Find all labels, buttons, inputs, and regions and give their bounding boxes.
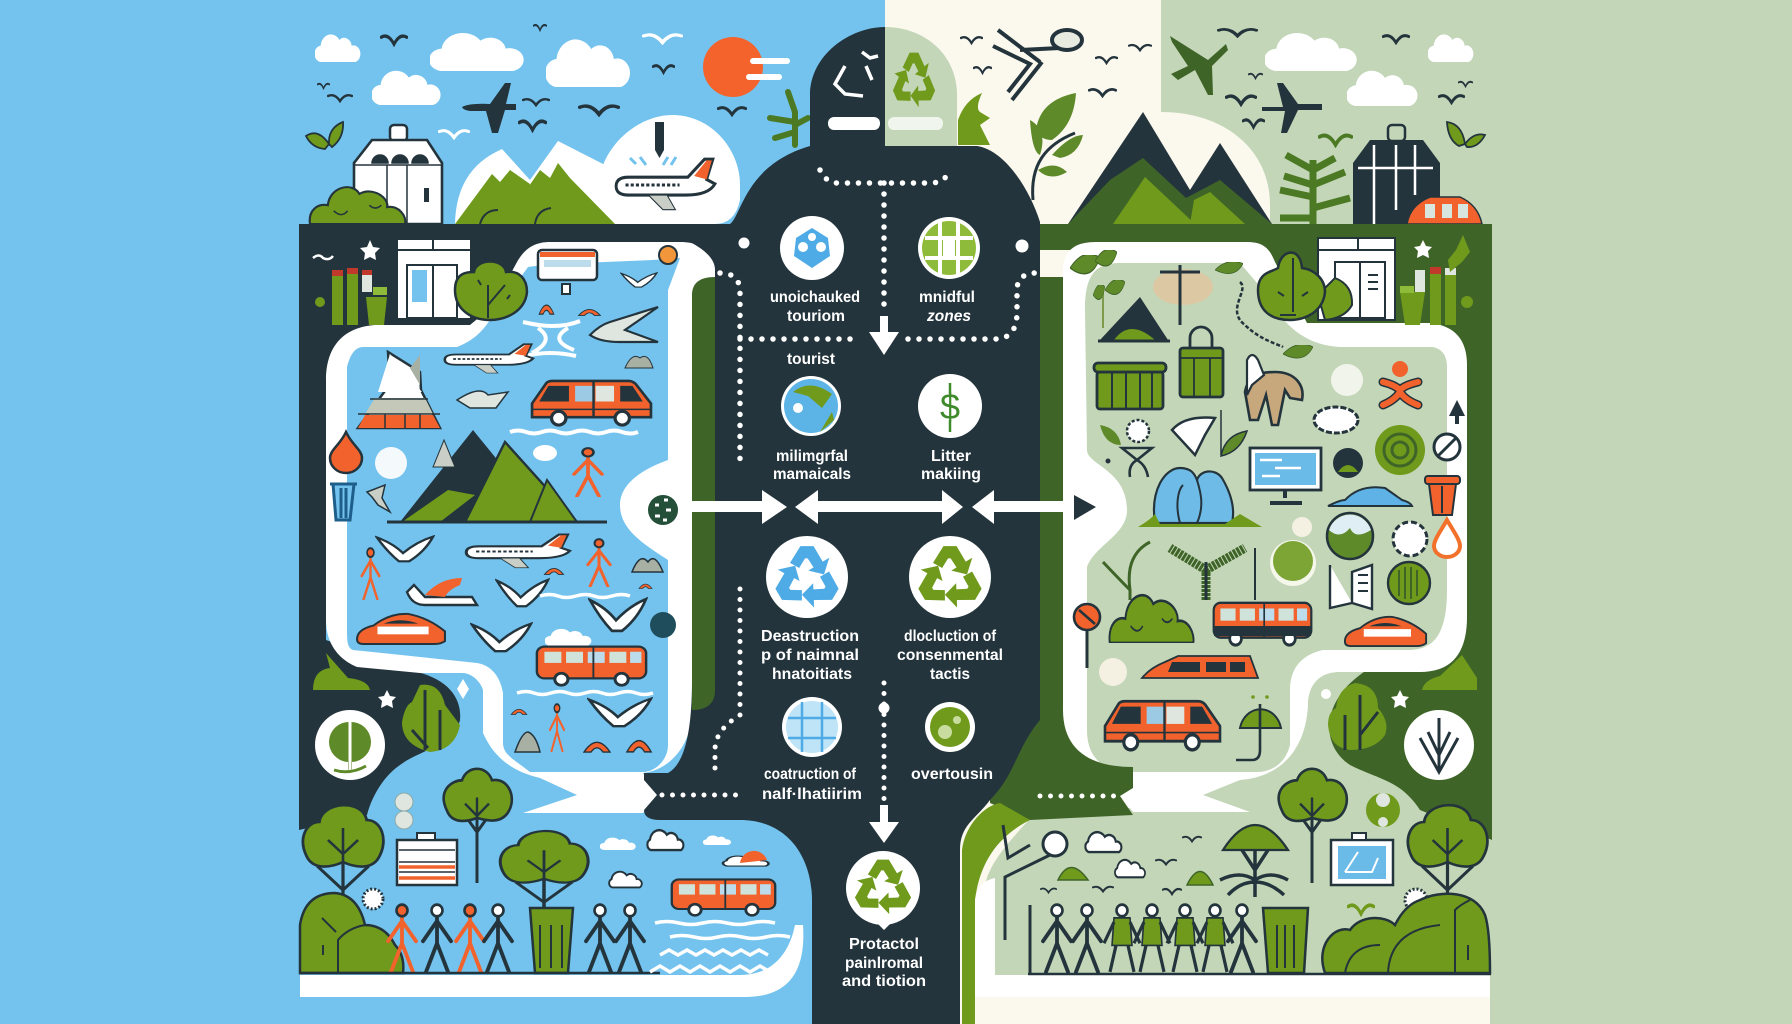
left panel: tent pyramid xyxy=(358,352,440,428)
right frame: leaves xyxy=(1448,235,1470,272)
left panel: grey animal xyxy=(367,485,390,512)
left green stripe xyxy=(692,277,715,710)
lower right: green bin xyxy=(1263,908,1308,973)
left building xyxy=(354,125,442,224)
lower right: lamp post xyxy=(1003,825,1067,940)
right panel: blue water figures xyxy=(1138,468,1262,527)
left panel: white border xyxy=(326,242,717,813)
right panel: blue cap xyxy=(1328,487,1412,506)
left blob: white circle tree icon xyxy=(315,710,385,780)
left landscape: white mountain backdrop xyxy=(455,141,605,224)
olive curved stripe xyxy=(962,803,1030,1024)
right building xyxy=(1353,125,1440,224)
left landscape: green mountains xyxy=(455,163,615,224)
right panel: dark circle xyxy=(1333,448,1363,478)
left blob: sparkle xyxy=(457,679,469,699)
left panel: gull xyxy=(590,599,646,631)
left panel: white globe xyxy=(375,447,407,479)
right panel: orange bin xyxy=(1425,476,1460,515)
dotted circle xyxy=(650,612,676,638)
right panel: fuzzy green globe xyxy=(1270,540,1316,586)
left panel: orange domes xyxy=(539,305,600,315)
lower left: tree xyxy=(444,769,512,883)
item: minimal materials: mamaicals xyxy=(773,466,851,483)
item: litter making xyxy=(918,374,982,483)
lower left: green bin xyxy=(530,908,573,973)
white node dots xyxy=(738,238,1028,714)
lower right: tree xyxy=(1279,769,1347,883)
left blob: star xyxy=(378,690,396,708)
right sky: dark plane xyxy=(1262,83,1322,133)
left panel: white splash xyxy=(523,321,580,356)
left blob: green mound xyxy=(313,653,370,690)
lower right: dotted circle xyxy=(1405,889,1427,911)
left panel: orange car xyxy=(357,614,445,644)
left sky: dark plane xyxy=(462,83,516,133)
right sky: birds xyxy=(1219,29,1472,145)
right panel: bag xyxy=(1180,327,1223,397)
left panel: rock xyxy=(515,732,540,752)
right frame: star xyxy=(1414,240,1432,258)
left panel: blue bin xyxy=(330,484,357,520)
right frame: round tree xyxy=(1258,253,1352,320)
left panel: wave xyxy=(540,594,630,598)
dark arrow head xyxy=(1074,495,1096,520)
item: destruction of natural habitats xyxy=(761,536,859,683)
item: mindful zones xyxy=(918,217,980,325)
item: protected natural and traction: painlromal xyxy=(845,955,923,972)
right sky: green plane xyxy=(1170,36,1228,95)
left panel: small islet xyxy=(457,391,508,408)
left panel: gull xyxy=(377,537,433,561)
item: construction of infrastructure: nalf·lhatiirim xyxy=(762,786,862,803)
item: mindful zones: mnidful xyxy=(919,289,975,306)
lower right: big tree xyxy=(1408,805,1487,898)
left panel: orange bus xyxy=(532,381,651,425)
left panel: white airliner xyxy=(445,344,533,373)
lower right: small blob xyxy=(1366,793,1400,827)
item: protected natural and traction xyxy=(842,851,926,990)
left panel: orange dot xyxy=(659,246,677,264)
lower-right sage ground xyxy=(985,808,1170,975)
left panel: gull xyxy=(589,699,651,726)
item: minimal materials xyxy=(773,376,851,483)
left panel: arcs xyxy=(584,741,651,752)
right panel: green spiral xyxy=(1375,425,1425,475)
right panel: no-entry post xyxy=(1074,604,1100,668)
left fern xyxy=(770,92,808,145)
left panel: wave xyxy=(510,430,638,434)
dotted connector lines (bottom) xyxy=(662,589,1118,800)
left panel: gull xyxy=(621,273,657,287)
item: unchecked tourism xyxy=(770,216,860,325)
right frame: cylinders and cup xyxy=(1400,267,1473,325)
lower right: small birds xyxy=(1041,837,1201,894)
lower right: green bird xyxy=(1348,905,1374,914)
left panel: orange drop xyxy=(330,432,362,473)
background: cream bottom strip xyxy=(960,997,1490,1024)
right panel: sage interior xyxy=(1085,263,1447,772)
item: litter making: Litter xyxy=(931,448,971,465)
lower right: bushes xyxy=(1322,894,1490,973)
cream dome behind right mountains xyxy=(1040,112,1270,224)
lower right: umbrella palm xyxy=(1220,825,1288,897)
left bush xyxy=(310,187,405,224)
lower-right white curve and bar xyxy=(975,878,1490,997)
right blob: white circle herringbone icon xyxy=(1404,710,1474,780)
item: litter making: makiing xyxy=(921,466,981,483)
left panel: small van xyxy=(538,250,597,294)
background: cream middle band xyxy=(885,0,1161,1024)
right frame: white building xyxy=(1318,238,1395,320)
item: disruction of environmental tactics xyxy=(897,536,1003,683)
item: disruction of environmental tactics: consenmental xyxy=(897,647,1003,664)
right panel: van xyxy=(1105,701,1220,750)
right panel: open book xyxy=(1330,565,1372,609)
left panel: small arcs xyxy=(544,568,652,589)
right panel: dark doodle globe xyxy=(1393,522,1427,556)
lower right: group of people xyxy=(1043,905,1256,972)
left frame: cylinders and cup xyxy=(313,256,387,325)
left panel: blue interior xyxy=(347,258,680,772)
right green frame xyxy=(1030,224,1492,840)
left panel: airliner xyxy=(466,534,570,568)
right panel: antenna bus xyxy=(1214,548,1311,645)
left panel: grey bird plane xyxy=(590,307,658,342)
lower left: ground line xyxy=(299,972,660,974)
item: destruction of natural habitats: Deastruction xyxy=(761,628,859,645)
right panel: green striped circle xyxy=(1388,562,1430,604)
right panel: flower figure xyxy=(1100,420,1152,477)
item: litter making: $ xyxy=(940,386,960,427)
right blob: mound xyxy=(1422,655,1477,690)
lower left: orange dome xyxy=(740,851,767,863)
right panel: white snow cap xyxy=(1247,355,1264,395)
item: protected natural and traction: and tiotion xyxy=(842,973,926,990)
left panel: gull xyxy=(472,624,531,651)
left frame: round tree xyxy=(455,262,527,320)
right panel: basket xyxy=(1094,363,1166,409)
lower left: pebbles xyxy=(395,793,413,829)
item: protected natural and traction: Protactol xyxy=(849,936,919,953)
left panel: long bus xyxy=(537,647,646,685)
right panel: van windows xyxy=(1168,662,1245,672)
lower right: suitcase sign xyxy=(1331,833,1393,885)
left panel: wave xyxy=(517,692,653,694)
right panel: white ball xyxy=(1331,364,1363,396)
right sky: clouds xyxy=(1264,33,1473,106)
item: destruction of natural habitats: p of naimnal xyxy=(761,647,859,664)
white horizontal arrows xyxy=(692,490,1063,524)
right blob: tree xyxy=(1328,683,1386,750)
left panel: person xyxy=(362,548,379,599)
right panel: mushroom xyxy=(1292,517,1312,537)
central dark column xyxy=(644,27,1040,1024)
left panel: rocks xyxy=(625,356,653,368)
item: mindful zones: zones xyxy=(926,308,971,325)
lower left: bush xyxy=(300,893,403,973)
lower left: suitcase sign xyxy=(397,833,457,885)
background: sage right side xyxy=(1161,0,1792,1024)
left panel: person xyxy=(588,539,610,586)
lower left: walking people xyxy=(388,905,644,972)
right panel: small tree xyxy=(1449,400,1465,424)
item: unchecked tourism: unoichauked xyxy=(770,289,860,306)
left panel: walking person xyxy=(574,448,602,496)
right blob: star xyxy=(1391,690,1409,708)
right panel: winged fern xyxy=(1170,548,1245,600)
item: construction of infrastructure xyxy=(762,697,862,803)
right mountains xyxy=(1068,112,1272,224)
right panel: vine xyxy=(1215,261,1313,358)
lower right: ground line xyxy=(1028,973,1491,975)
left panel: rocks xyxy=(632,559,663,572)
right panel: orange figure xyxy=(1383,361,1418,405)
lower left: broad tree xyxy=(500,831,588,909)
right panel: monitor xyxy=(1250,448,1321,503)
lower left: waves xyxy=(650,922,790,972)
right panel: tan hand xyxy=(1245,372,1303,425)
right panel: green bush xyxy=(1110,595,1194,643)
light green grass xyxy=(958,93,990,145)
left dark frame xyxy=(299,224,730,830)
right panel: landscape globe xyxy=(1327,513,1373,559)
right panel: tan sign xyxy=(1153,265,1213,325)
right panel: dark doodle xyxy=(1314,407,1358,433)
sun xyxy=(703,37,790,97)
lower left: clouds xyxy=(600,830,769,887)
item: minimal materials: milimgrfal xyxy=(776,448,848,465)
right panel: white mushroom xyxy=(1099,658,1127,686)
right fern xyxy=(1280,155,1350,224)
right panel: sprout xyxy=(1070,249,1125,328)
dome icon: broken recycle symbols and bars xyxy=(828,52,943,130)
green leafy branch xyxy=(1030,93,1083,200)
right butterfly xyxy=(1447,122,1485,147)
right panel: tent xyxy=(1098,297,1170,341)
lower right: clouds xyxy=(1085,832,1145,877)
item: disruction of environmental tactics: dlocluction of xyxy=(904,628,997,645)
right panel: fish doodle xyxy=(1172,410,1247,456)
top-right plane with loupe xyxy=(993,30,1082,100)
right orange train xyxy=(1407,197,1482,224)
left landscape: white dome with airliner xyxy=(603,115,740,224)
right panel: orange car xyxy=(1345,617,1426,646)
right blob: small white blot xyxy=(1321,689,1331,699)
down arrow (bottom) xyxy=(869,805,899,843)
down arrow (top) xyxy=(869,316,899,355)
right lower green connector xyxy=(990,277,1133,820)
right panel: prohibited sign xyxy=(1434,434,1460,460)
left panel: small orange dome xyxy=(511,709,527,714)
white dots in dark circle xyxy=(655,500,671,520)
dotted circle left panel edge xyxy=(648,495,678,525)
item: destruction of natural habitats: hnatoitiats xyxy=(772,666,852,683)
item: overtourism: overtousin xyxy=(911,766,993,783)
item: unchecked tourism: touriom xyxy=(787,308,845,325)
left sky: birds xyxy=(318,25,746,138)
item: disruction of environmental tactics: tactis xyxy=(930,666,970,683)
left panel: striped oval xyxy=(533,445,557,461)
right panel: white border xyxy=(1063,242,1467,812)
left sky: clouds xyxy=(315,33,630,105)
left panel: white cloud xyxy=(545,629,591,646)
lower right: post xyxy=(1028,905,1032,973)
left panel: person xyxy=(550,704,564,751)
lower right: green lumps xyxy=(1058,868,1213,885)
lower left: dark dotted circle xyxy=(363,889,383,909)
label: tourist: tourist xyxy=(787,351,835,368)
left frame: white building xyxy=(398,240,470,318)
left frame: star xyxy=(360,240,380,260)
dotted connector lines (top) xyxy=(720,170,1035,468)
right panel: umbrella xyxy=(1236,695,1281,760)
middle sky: birds xyxy=(961,37,1151,96)
left blob: tree xyxy=(402,685,460,752)
left panel: mountains xyxy=(387,430,607,522)
left panel: boat xyxy=(407,578,477,605)
item: construction of infrastructure: coatruction of xyxy=(764,766,857,783)
lower left: bus xyxy=(672,879,775,915)
dome right half xyxy=(885,27,957,146)
right panel: long van xyxy=(1142,656,1258,678)
left panel: gull xyxy=(497,580,548,606)
background: blue left half xyxy=(0,0,885,1024)
left butterfly xyxy=(306,122,343,149)
right panel: reed plant xyxy=(1103,542,1150,600)
lower-left white bar xyxy=(300,925,803,997)
lower left: big tree xyxy=(303,805,383,898)
right panel: orange flame xyxy=(1434,520,1460,557)
item: overtourism xyxy=(911,702,993,783)
